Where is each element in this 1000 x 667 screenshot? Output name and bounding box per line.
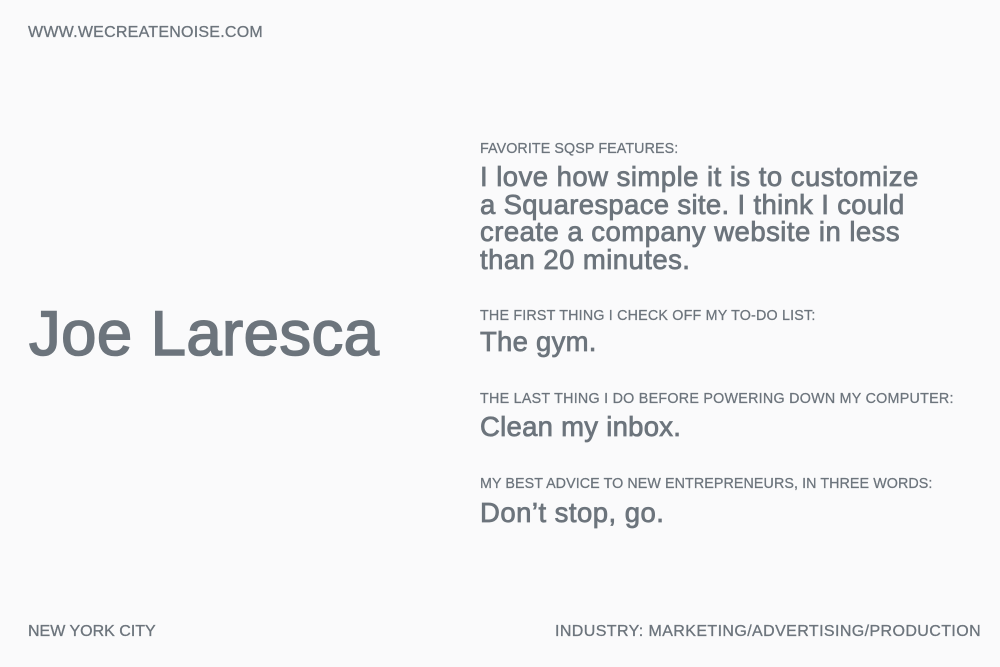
answer: favorite features bbox=[480, 161, 919, 274]
question: best advice: MY BEST ADVICE TO NEW ENTREPRENEURS, IN THREE WORDS: bbox=[480, 476, 932, 492]
name heading: Joe Laresca bbox=[29, 299, 379, 369]
question: favorite features: FAVORITE SQSP FEATURES: bbox=[480, 141, 678, 157]
answer: favorite features: I love how simple it is to customize bbox=[480, 161, 919, 192]
answer: favorite features: than 20 minutes. bbox=[480, 244, 690, 274]
question: to-do list: THE FIRST THING I CHECK OFF MY TO-DO LIST: bbox=[480, 308, 816, 324]
industry: INDUSTRY: MARKETING/ADVERTISING/PRODUCTION bbox=[555, 623, 981, 640]
answer: to-do list: The gym. bbox=[480, 326, 597, 357]
location: NEW YORK CITY bbox=[28, 623, 156, 640]
answer: last thing: Clean my inbox. bbox=[480, 411, 681, 442]
website url: WWW.WECREATENOISE.COM bbox=[28, 24, 263, 41]
answer: best advice: Don’t stop, go. bbox=[480, 497, 664, 528]
answer: favorite features: create a company website in less bbox=[480, 216, 900, 247]
question: last thing: THE LAST THING I DO BEFORE POWERING DOWN MY COMPUTER: bbox=[480, 391, 954, 407]
answer: favorite features: a Squarespace site. I think I could bbox=[480, 188, 905, 220]
